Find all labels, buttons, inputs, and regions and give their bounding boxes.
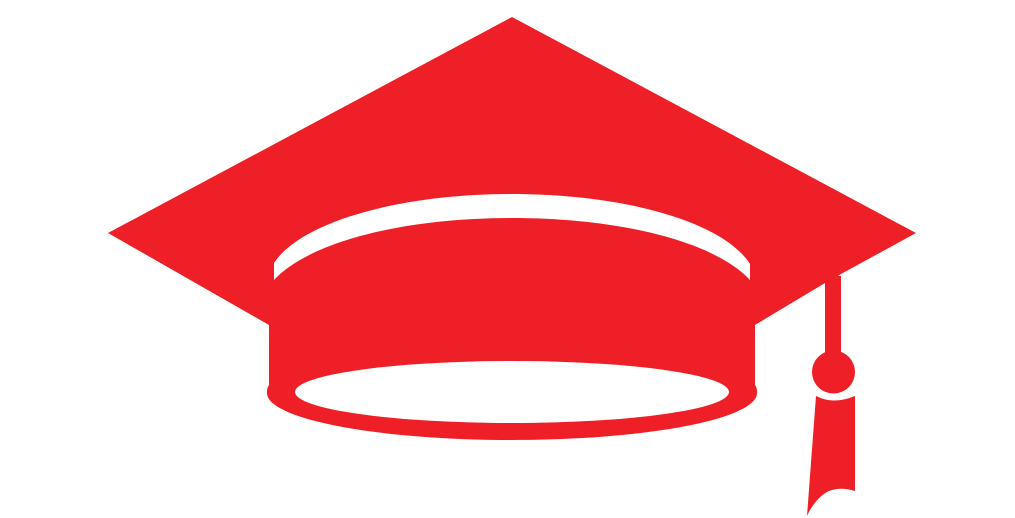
tassel cord [825, 276, 841, 360]
white band on cap [274, 194, 750, 280]
tassel knot [812, 350, 855, 394]
tassel fringe [807, 396, 855, 516]
cap body with mortarboard and brim [108, 17, 916, 440]
white ellipse opening [295, 361, 729, 423]
tassel [807, 276, 855, 516]
